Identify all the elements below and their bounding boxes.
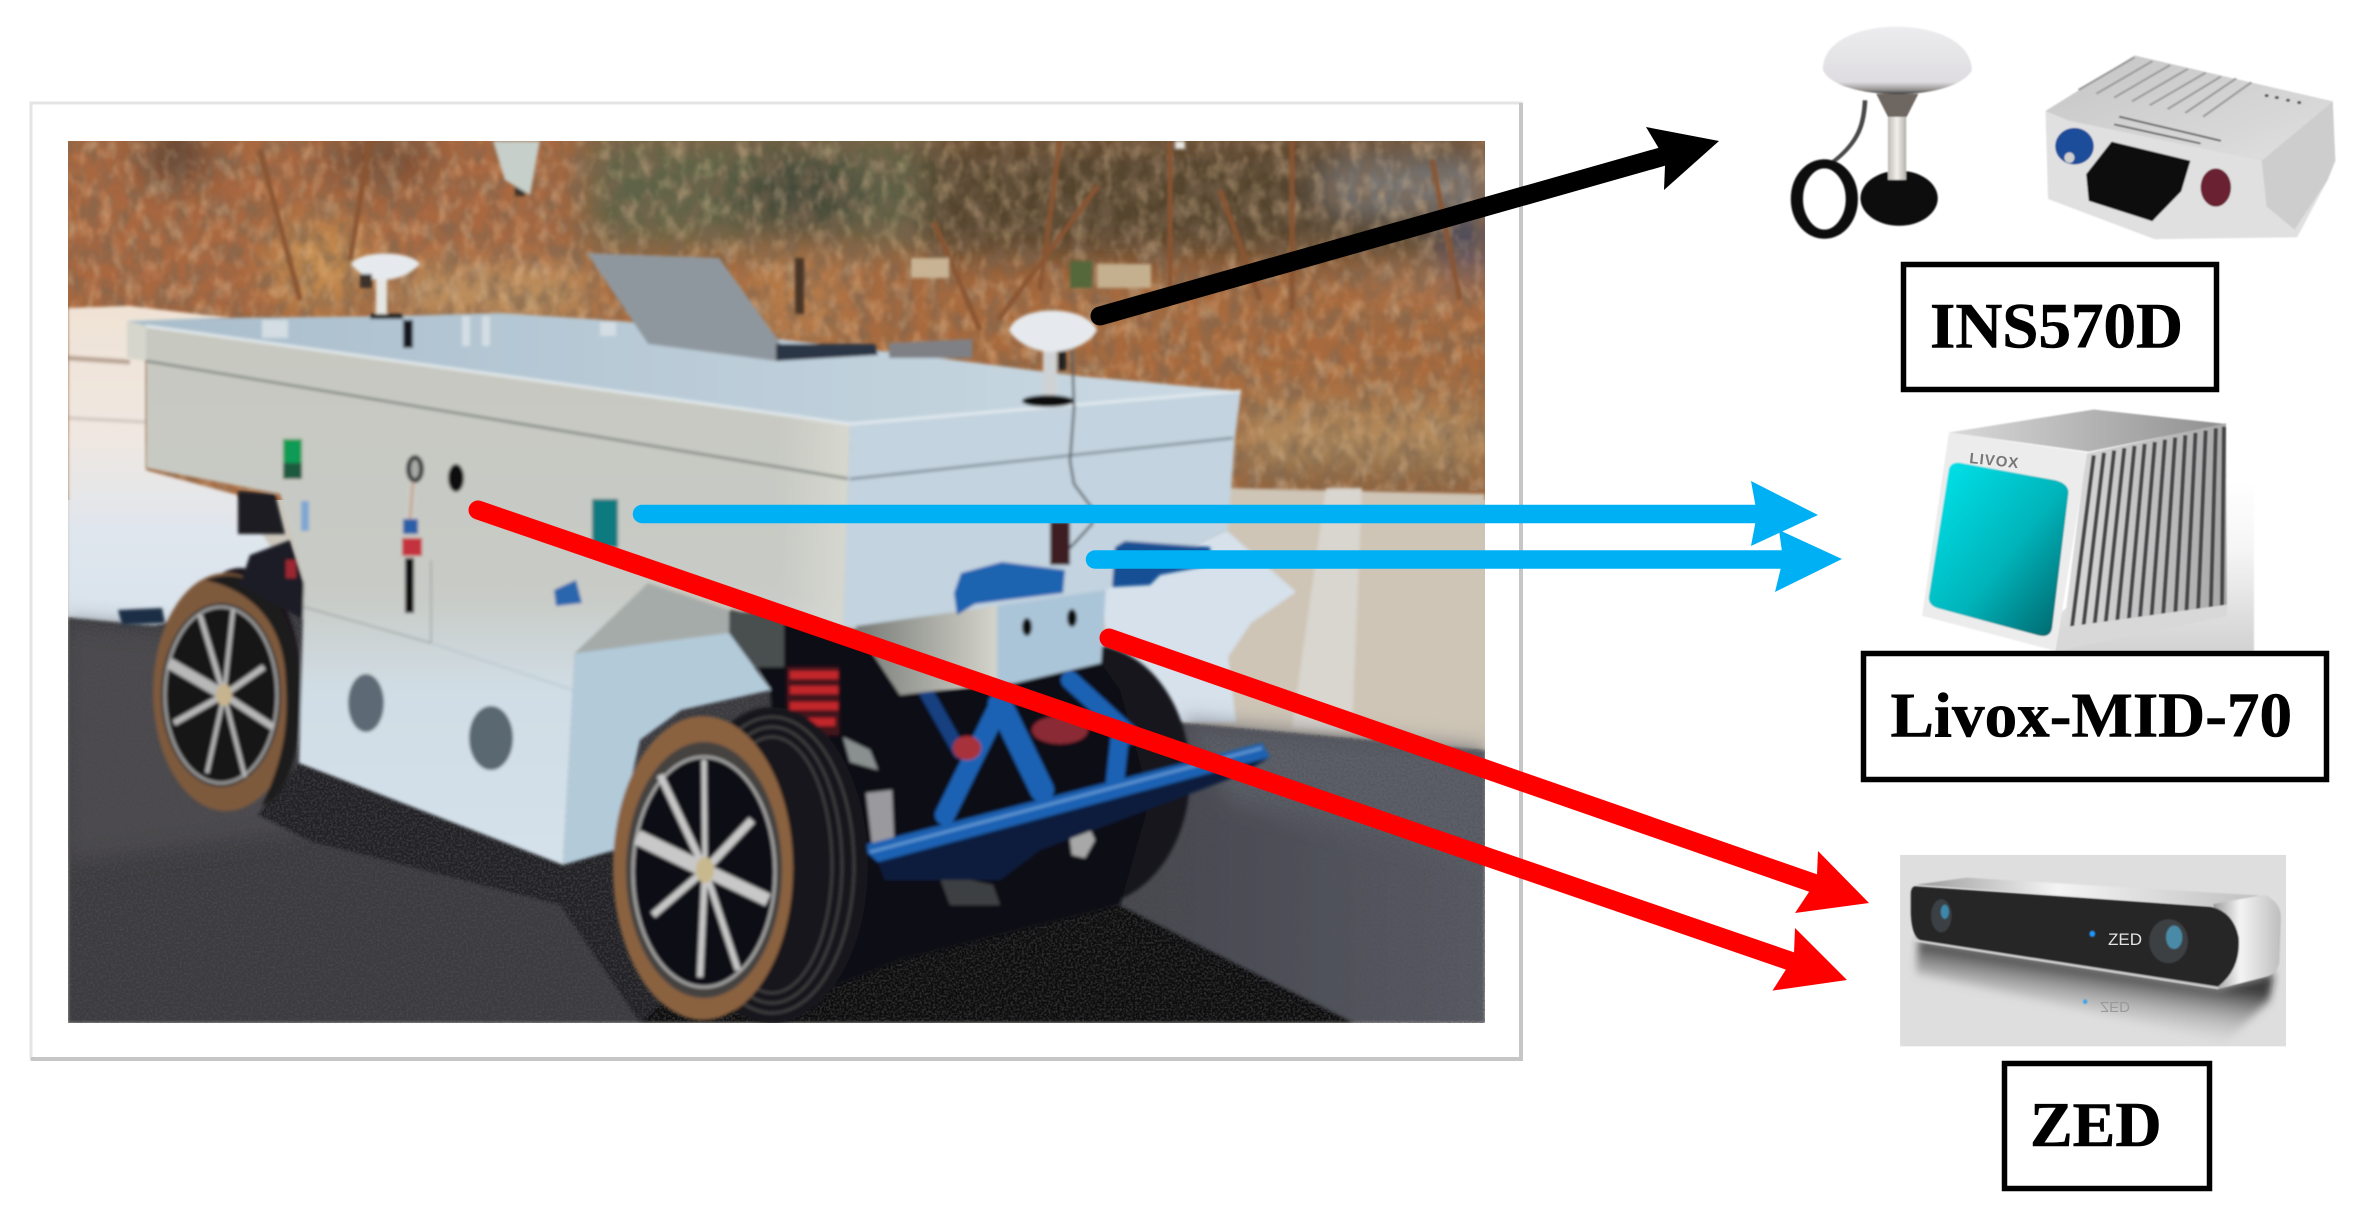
arrow: lower red to ZED bbox=[478, 510, 1847, 991]
icon: Livox MID-70 lidar bbox=[1922, 409, 2254, 651]
text: ZED logo reflection: ZED bbox=[2100, 998, 2130, 1015]
foliage highlights bbox=[68, 141, 1485, 491]
back right wheel bbox=[990, 645, 1190, 905]
recess and lower side bbox=[563, 633, 771, 865]
photo: vehicle on road bbox=[60, 130, 1490, 1023]
shadow under vehicle bbox=[257, 763, 1355, 1023]
undercarriage bbox=[729, 610, 1150, 1000]
foliage texture bbox=[68, 141, 1485, 491]
arrow: black to INS570D bbox=[1100, 127, 1719, 316]
text: ZED logo: ZED bbox=[2108, 930, 2142, 949]
right face bbox=[843, 391, 1241, 628]
lower front box bbox=[855, 602, 997, 695]
label: ZED: ZED bbox=[2030, 1089, 2162, 1160]
right pavement bbox=[1178, 488, 1485, 752]
left antenna bbox=[376, 272, 387, 316]
asphalt bbox=[68, 600, 1485, 1023]
front wheel sidewall bbox=[613, 716, 793, 1020]
label: Livox-MID-70: Livox-MID-70 bbox=[1890, 680, 2292, 750]
blue frame bbox=[925, 680, 1130, 815]
label: INS570D bbox=[1904, 264, 2216, 390]
laptop bbox=[587, 253, 781, 361]
arrow: upper red to ZED bbox=[1109, 638, 1869, 913]
panel: vehicle photo frame bbox=[31, 103, 1521, 1059]
rear wheel bbox=[221, 566, 301, 674]
label: Livox-MID-70 bbox=[1864, 654, 2326, 780]
fence pieces bbox=[911, 258, 949, 278]
left ground and snow bbox=[68, 306, 304, 628]
arrow: upper blue to Livox bbox=[642, 481, 1818, 546]
dark block under lid bbox=[238, 491, 285, 534]
arrow: lower blue to Livox bbox=[1095, 530, 1842, 592]
blue sensor mounts bbox=[954, 562, 1065, 615]
lid top bbox=[127, 313, 1241, 424]
icon: INS570D unit bbox=[2046, 55, 2335, 239]
spring bbox=[787, 667, 839, 735]
text: LIVOX logo: LIVOX bbox=[1969, 450, 2020, 472]
connector bbox=[1050, 521, 1070, 565]
dark object behind rear wheel bbox=[118, 608, 165, 625]
label: INS570D: INS570D bbox=[1930, 290, 2183, 362]
icon: ZED stereo camera bbox=[1900, 855, 2286, 1046]
front wheel tread bbox=[676, 707, 868, 1023]
vehicle side panel bbox=[146, 326, 850, 865]
icon: GNSS antenna bbox=[1797, 27, 1972, 234]
tree branches bbox=[260, 141, 1460, 330]
label: ZED bbox=[2004, 1064, 2210, 1188]
side fittings bbox=[348, 674, 384, 732]
right antenna bbox=[1070, 348, 1092, 548]
